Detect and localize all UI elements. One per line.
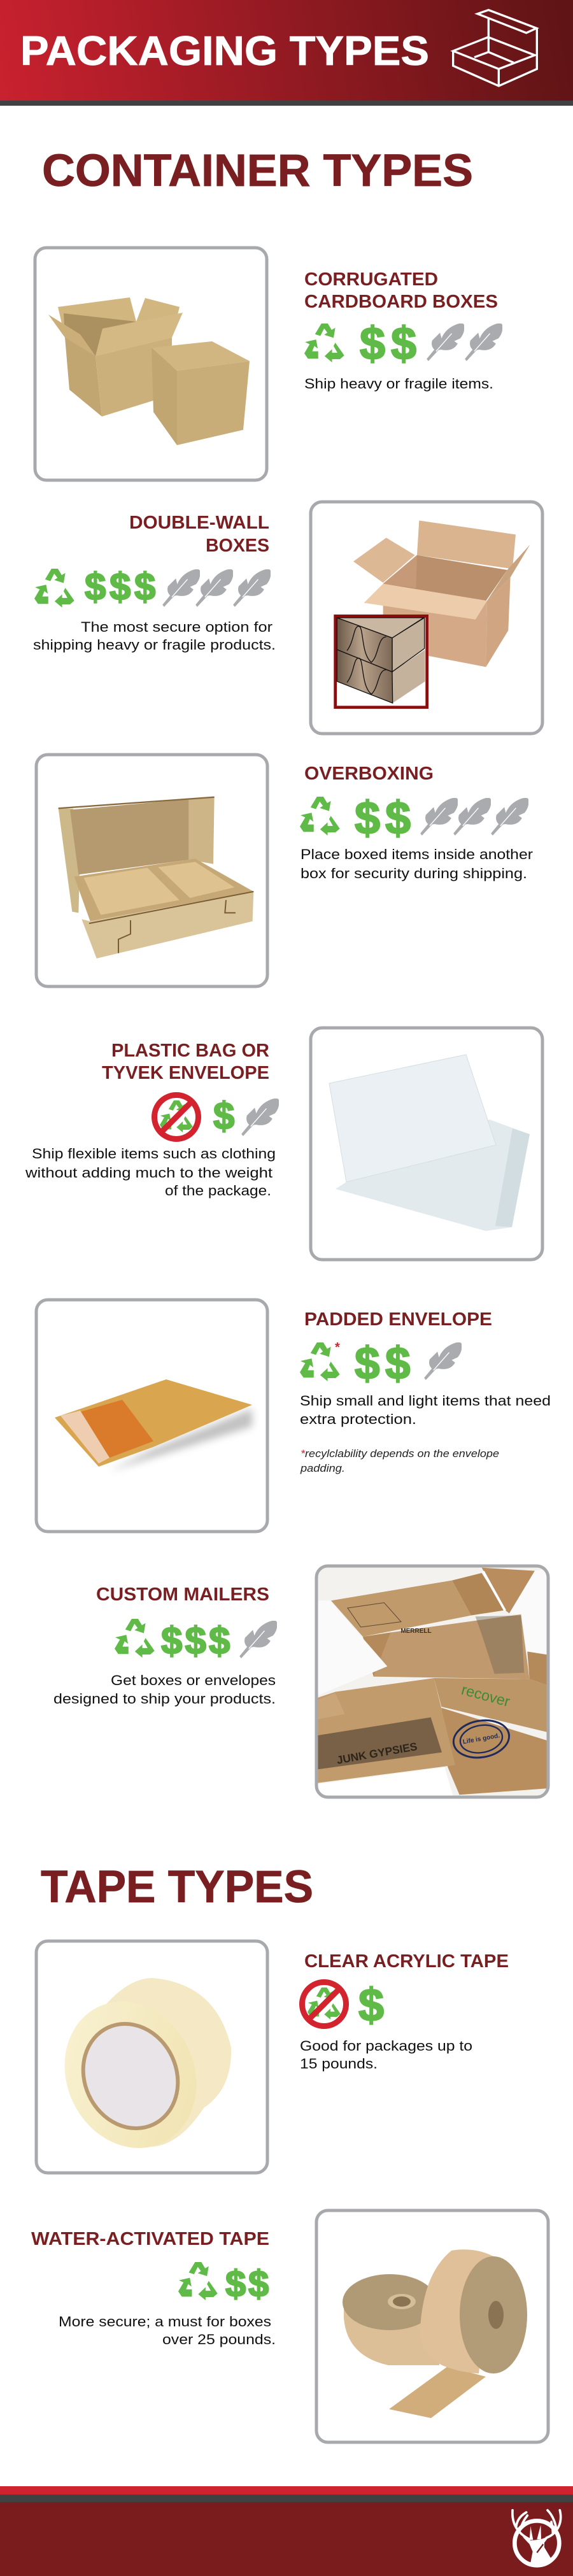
icon: recyclable bbox=[304, 324, 344, 362]
photo card: box inside a box bbox=[36, 755, 267, 986]
footer band bbox=[0, 2486, 573, 2576]
description bbox=[53, 1672, 276, 1707]
panel: double-wall boxes bbox=[33, 502, 542, 734]
description: Good for packages up to bbox=[300, 2038, 472, 2054]
heading: tape types: TAPE TYPES bbox=[41, 1862, 313, 1912]
photo card: kraft gummed tape rolls bbox=[316, 2210, 548, 2442]
logo text: recover bbox=[460, 1681, 512, 1710]
logo: life is good ring bbox=[452, 1719, 511, 1759]
item heading: BOXES bbox=[206, 536, 269, 556]
item heading: PLASTIC BAG OR bbox=[111, 1041, 269, 1061]
photo card: tyvek envelopes bbox=[311, 1028, 542, 1260]
icon: weight rating bbox=[420, 798, 528, 836]
logo text bbox=[336, 1628, 512, 1767]
photo card: padded envelope bbox=[36, 1300, 267, 1532]
description: shipping heavy or fragile products. bbox=[33, 637, 276, 653]
icon: cost rating: $$ bbox=[225, 2263, 269, 2305]
description bbox=[300, 2038, 472, 2072]
icon: cost rating: $$ bbox=[355, 1339, 410, 1389]
icon: recyclable with asterisk: * bbox=[335, 1341, 340, 1355]
icon: cost rating: $ bbox=[213, 1095, 234, 1137]
panel: padded envelope bbox=[36, 1300, 551, 1532]
icon: recyclable bbox=[115, 1619, 155, 1658]
item heading: WATER-ACTIVATED TAPE bbox=[31, 2229, 269, 2249]
description bbox=[25, 1146, 276, 1199]
icon: cost rating: $$$ bbox=[85, 566, 155, 608]
description: Place boxed items inside another bbox=[301, 846, 533, 862]
footnote bbox=[300, 1448, 499, 1474]
icon: weight rating bbox=[162, 569, 271, 607]
item heading: CARDBOARD BOXES bbox=[304, 292, 498, 312]
description bbox=[301, 846, 533, 881]
icon: recyclable bbox=[178, 2262, 218, 2300]
description bbox=[300, 1393, 551, 1427]
icon: open box outline bbox=[453, 10, 537, 86]
panel: custom mailers bbox=[53, 1566, 548, 1798]
description bbox=[33, 619, 276, 653]
icon: cost rating: $$ bbox=[360, 318, 416, 369]
icon: cost rating: $ bbox=[358, 1980, 384, 2031]
icon: stag logo bbox=[513, 2510, 561, 2565]
item heading bbox=[129, 513, 269, 556]
description: of the package. bbox=[165, 1183, 271, 1199]
photo card: open box with double wall cross-section bbox=[311, 502, 542, 734]
description: Ship flexible items such as clothing bbox=[32, 1146, 276, 1162]
item heading bbox=[304, 269, 498, 312]
item heading bbox=[102, 1041, 269, 1083]
description: Ship small and light items that need bbox=[300, 1393, 551, 1409]
panel: corrugated cardboard boxes bbox=[35, 248, 502, 480]
icon: weight rating bbox=[424, 1342, 462, 1380]
description: 15 pounds. bbox=[300, 2056, 378, 2072]
logo text: JUNK GYPSIES bbox=[336, 1740, 418, 1767]
icon: recyclable with asterisk bbox=[300, 1341, 340, 1381]
icon: recyclable bbox=[34, 569, 74, 608]
photo card: branded kraft mailers bbox=[316, 1566, 548, 1798]
description: without adding much to the weight bbox=[25, 1165, 272, 1181]
icon: cost rating: $$$ bbox=[161, 1619, 230, 1662]
panel: water-activated tape bbox=[31, 2210, 548, 2442]
logo text: MERRELL bbox=[400, 1628, 432, 1635]
item heading: PADDED ENVELOPE bbox=[304, 1309, 492, 1330]
icon: not recyclable bbox=[302, 1982, 346, 2026]
icon: weight rating bbox=[427, 324, 502, 361]
footnote: padding. bbox=[300, 1462, 345, 1474]
description: Ship heavy or fragile items. bbox=[304, 376, 493, 392]
icon: weight rating bbox=[241, 1099, 279, 1136]
item heading: OVERBOXING bbox=[304, 764, 434, 784]
description bbox=[59, 2314, 276, 2347]
photo card: clear tape roll bbox=[36, 1941, 267, 2173]
photo card: two cardboard boxes bbox=[35, 248, 267, 480]
item heading: CORRUGATED bbox=[304, 269, 438, 290]
logo: life is good ring: Life is good. bbox=[462, 1732, 500, 1746]
panel: plastic bag or tyvek envelope bbox=[25, 1028, 542, 1260]
header banner bbox=[0, 0, 573, 106]
panel: overboxing bbox=[36, 755, 533, 986]
item heading: CLEAR ACRYLIC TAPE bbox=[304, 1951, 509, 1972]
heading: container types: CONTAINER TYPES bbox=[42, 146, 473, 196]
description: over 25 pounds. bbox=[162, 2331, 276, 2347]
description: designed to ship your products. bbox=[53, 1691, 276, 1707]
description: Get boxes or envelopes bbox=[111, 1672, 276, 1688]
footnote: *recylclability depends on the envelope bbox=[301, 1448, 499, 1460]
icon: weight rating bbox=[239, 1621, 277, 1658]
description: More secure; a must for boxes bbox=[59, 2314, 271, 2330]
item heading: CUSTOM MAILERS bbox=[96, 1584, 269, 1605]
description: The most secure option for bbox=[81, 619, 272, 635]
title: PACKAGING TYPES bbox=[20, 27, 429, 74]
icon: cost rating: $$ bbox=[355, 793, 411, 844]
panel: clear acrylic tape bbox=[36, 1941, 509, 2173]
item heading: TYVEK ENVELOPE bbox=[102, 1063, 269, 1083]
description: box for security during shipping. bbox=[301, 865, 527, 881]
inset: corrugation detail bbox=[336, 616, 427, 708]
icon: not recyclable bbox=[154, 1095, 199, 1139]
icon: recyclable bbox=[300, 797, 340, 836]
item heading: DOUBLE-WALL bbox=[129, 513, 269, 533]
description: extra protection. bbox=[300, 1411, 416, 1427]
